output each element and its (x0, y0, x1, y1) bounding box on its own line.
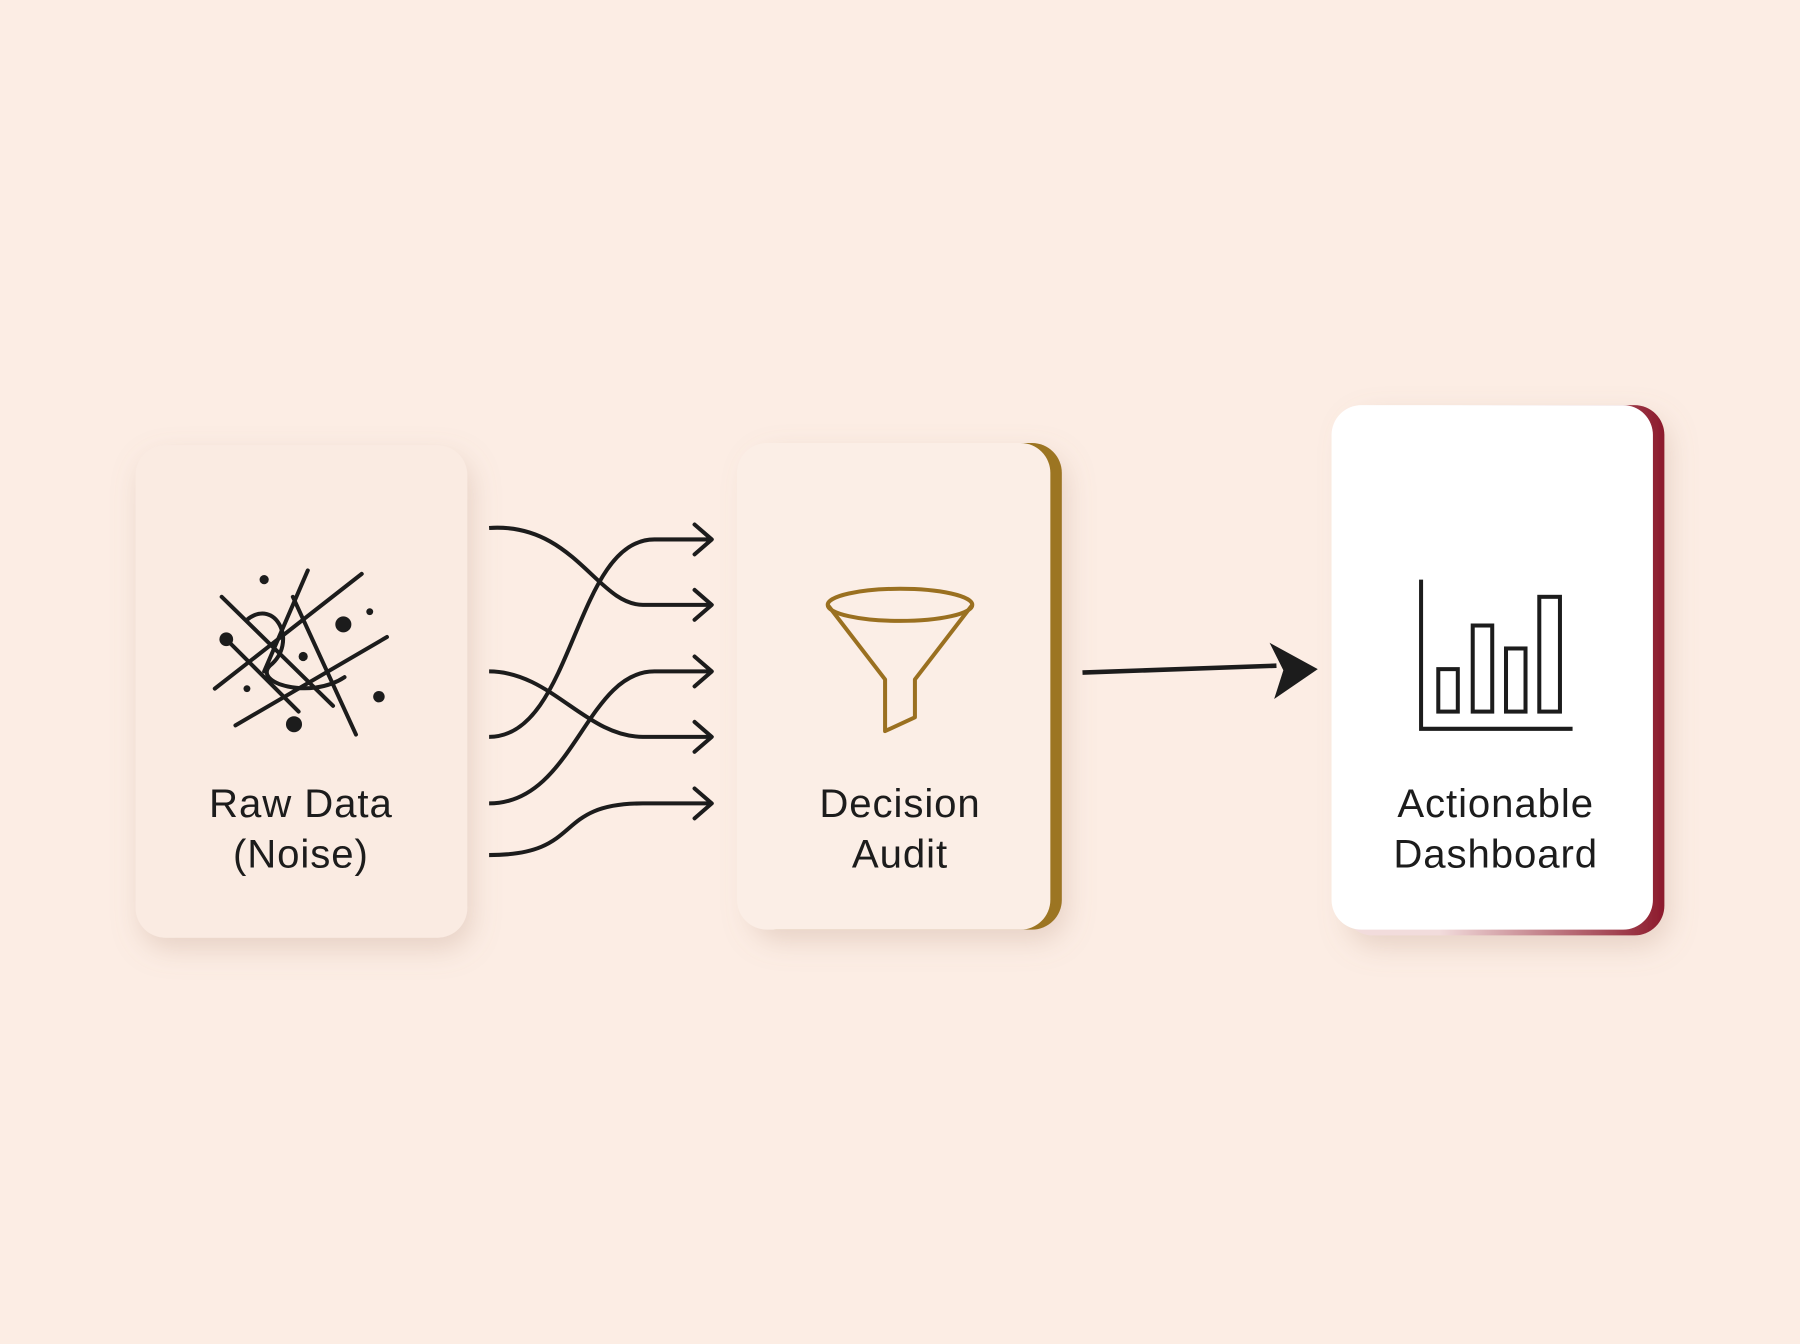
arrow: to dashboard (1082, 643, 1318, 699)
icon: noise (215, 570, 387, 735)
label: decision audit: Decision (819, 781, 981, 826)
label: raw data: Raw Data (209, 781, 393, 826)
card: decision audit (737, 443, 1062, 930)
label: dashboard: Dashboard (1393, 832, 1598, 877)
icon: funnel (828, 589, 972, 731)
label: decision audit: Audit (852, 832, 948, 877)
arrows: crossing flows (489, 528, 712, 855)
card: raw data (136, 445, 467, 938)
icon: bar chart (1421, 580, 1573, 729)
label: raw data: (Noise) (233, 832, 369, 877)
card: actionable dashboard (1332, 405, 1664, 935)
label: dashboard: Actionable (1397, 781, 1594, 826)
